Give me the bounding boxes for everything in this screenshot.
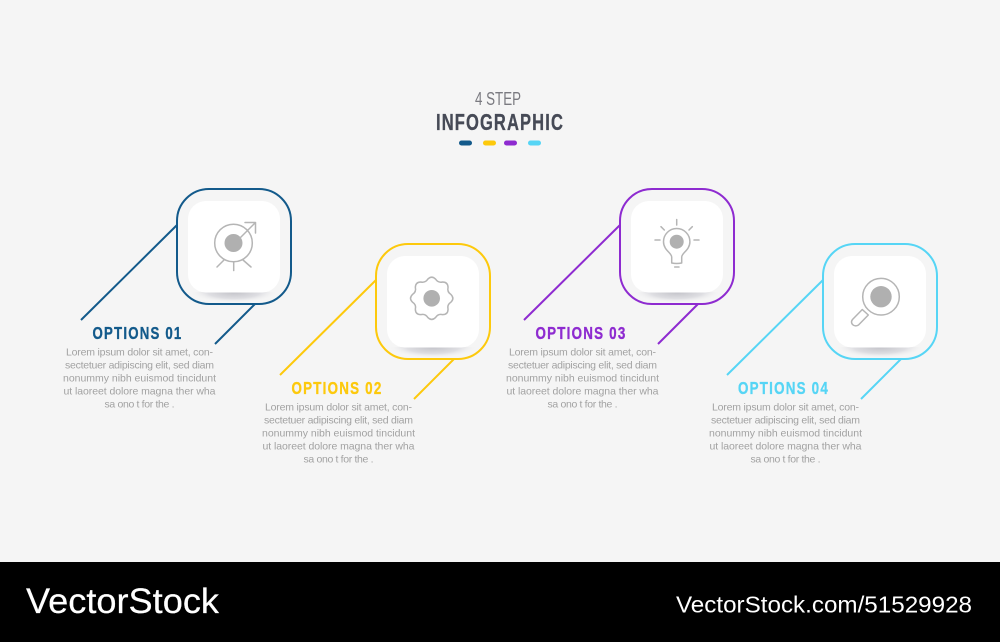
text block step 1: ut laoreet dolore magna ther wha — [64, 386, 216, 398]
footer image id: VectorStock.com/51529928 — [676, 591, 972, 617]
text block step 2 — [262, 402, 415, 466]
text block step 4: Lorem ipsum dolor sit amet, con- — [712, 402, 860, 414]
text block step 1: nonummy nibh euismod tincidunt — [63, 372, 216, 384]
text block step 2: sectetuer adipiscing elit, sed diam — [264, 414, 413, 426]
card step 2 — [376, 244, 490, 359]
connector lines step 4 — [727, 280, 901, 399]
panel: step 3 — [506, 189, 734, 410]
text block step 1 — [63, 346, 216, 410]
connector lines step 3 — [524, 225, 698, 344]
text block step 2: Lorem ipsum dolor sit amet, con- — [265, 402, 412, 414]
text block step 2: sa ono t for the . — [304, 454, 374, 466]
connector lines step 1 — [81, 225, 255, 344]
text block step 4 — [709, 402, 862, 466]
icon: target with arrow — [215, 222, 256, 270]
text block step 3: ut laoreet dolore magna ther wha — [506, 386, 659, 398]
text block step 3: sectetuer adipiscing elit, sed diam — [508, 360, 657, 372]
heading: options 02: OPTIONS 02 — [292, 378, 382, 398]
card step 1 — [177, 189, 291, 304]
title: 4 STEP — [475, 89, 521, 109]
panel: step 1 — [63, 189, 291, 410]
text block step 3: nonummy nibh euismod tincidunt — [506, 372, 659, 384]
text block step 4: ut laoreet dolore magna ther wha — [710, 440, 862, 452]
connector lines step 2 — [280, 280, 454, 399]
panel: step 2 — [262, 244, 490, 466]
text block step 3: sa ono t for the . — [548, 398, 618, 410]
heading: options 04: OPTIONS 04 — [738, 378, 829, 398]
icon: badge gear — [411, 277, 453, 319]
text block step 3: Lorem ipsum dolor sit amet, con- — [509, 346, 656, 358]
icon: magnifying glass — [852, 278, 899, 326]
text block step 4: sa ono t for the . — [750, 454, 820, 466]
footer bar — [0, 562, 1000, 642]
icon: light bulb — [655, 220, 699, 267]
card step 4 — [823, 244, 937, 359]
title: INFOGRAPHIC — [436, 109, 564, 135]
panel: step 4 — [709, 244, 937, 466]
text block step 4: sectetuer adipiscing elit, sed diam — [711, 414, 860, 426]
heading: options 01: OPTIONS 01 — [92, 323, 182, 343]
text block step 1: Lorem ipsum dolor sit amet, con- — [66, 346, 214, 358]
text block step 2: ut laoreet dolore magna ther wha — [262, 440, 415, 452]
text block step 3 — [506, 346, 659, 410]
heading: options 03: OPTIONS 03 — [536, 323, 626, 343]
title — [436, 89, 564, 135]
text block step 4: nonummy nibh euismod tincidunt — [709, 428, 862, 440]
text block step 2: nonummy nibh euismod tincidunt — [262, 428, 415, 440]
text block step 1: sa ono t for the . — [104, 398, 174, 410]
colour key dashes — [459, 140, 541, 146]
footer logo: VectorStock — [26, 582, 220, 621]
text block step 1: sectetuer adipiscing elit, sed diam — [65, 360, 214, 372]
card step 3 — [620, 189, 734, 304]
